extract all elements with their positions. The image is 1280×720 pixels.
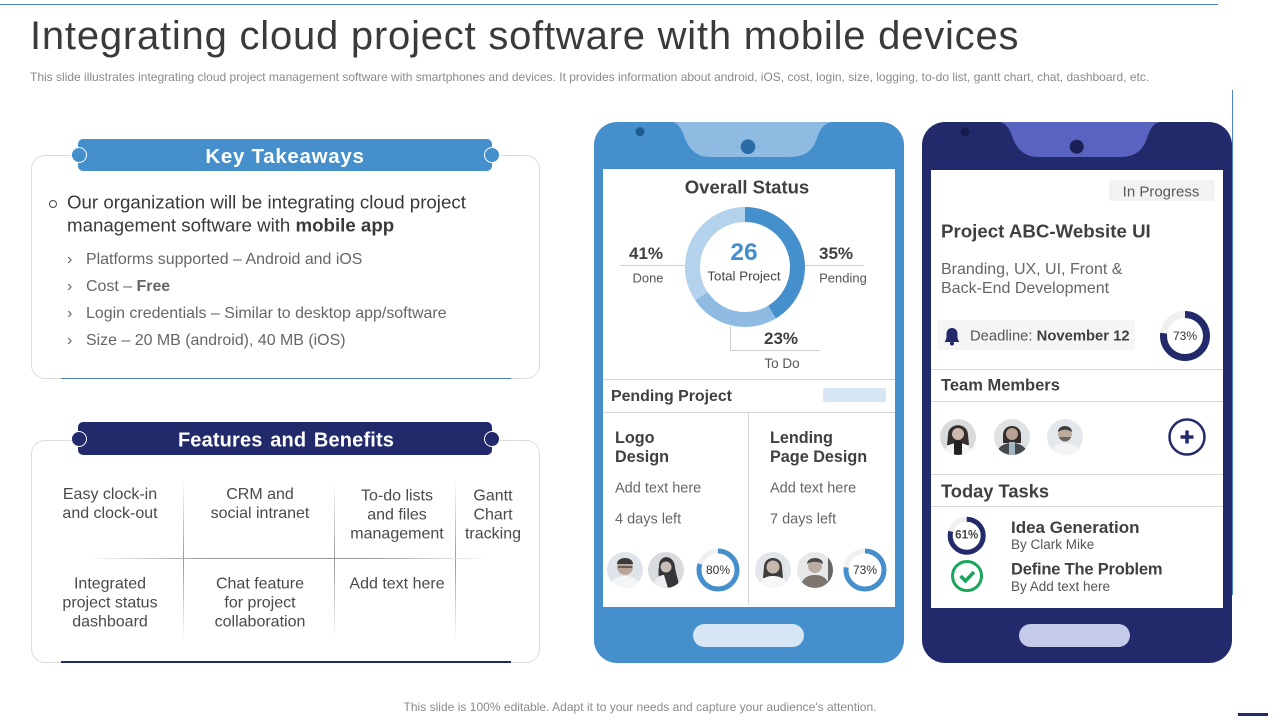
total label: Total Project — [707, 268, 781, 283]
feature: to-do — [350, 487, 444, 542]
panel: features and benefits — [31, 422, 540, 663]
feature: clock-in: and clock-out — [62, 504, 158, 522]
task: logo text: Add text here — [615, 481, 701, 497]
feature: add text: Add text here — [349, 575, 445, 592]
heading: key takeaways — [78, 139, 492, 171]
heading: today tasks: Today Tasks — [941, 480, 1049, 501]
label: done: Done — [632, 271, 664, 286]
label: to do: To Do — [764, 356, 800, 371]
total number: 26 — [730, 239, 758, 266]
feature: dashboard: project status — [62, 594, 158, 611]
panel: phone overall status — [594, 122, 904, 663]
top rule — [0, 4, 1218, 5]
ring label 80: 80% — [706, 563, 730, 577]
progress ring 73 — [846, 551, 884, 589]
task: lending design: Page Design — [770, 448, 867, 466]
list: platforms: Platforms supported – Android and iOS — [86, 251, 362, 268]
list: cost: Cost – Free — [86, 278, 170, 295]
heading: team members: Team Members — [941, 377, 1060, 395]
title: Integrating cloud project software with mobile devices — [30, 14, 1019, 58]
feature: to-do: To-do lists — [361, 487, 433, 504]
feature: chat: for project — [224, 594, 296, 611]
panel: phone project detail — [922, 122, 1232, 663]
icon: add member — [1170, 420, 1204, 454]
task: logo design: Design — [615, 448, 669, 466]
list: login: Login credentials – Similar to desktop app/software — [86, 305, 447, 322]
bottom accent — [61, 378, 511, 379]
list: size: › — [67, 332, 72, 349]
task: define problem: Define The Problem — [1011, 561, 1162, 579]
feature: chat — [215, 575, 305, 630]
task: logo days: 4 days left — [615, 512, 681, 528]
stat: to do: 23% — [764, 329, 798, 348]
subtitle: This slide illustrates integrating cloud project management software with smartphones and devices. It provides information about android, iOS, cost, login, size, logging, to-do list, gantt chart, chat, dashboard, etc. — [30, 70, 1149, 84]
task: lending text: Add text here — [770, 481, 856, 497]
feature: gantt: tracking — [465, 525, 521, 542]
stat: done: 41% — [629, 244, 663, 263]
avatars — [940, 419, 976, 455]
task: logo design — [615, 428, 669, 466]
feature: dashboard: Integrated — [74, 575, 146, 592]
feature: gantt — [465, 487, 521, 542]
stat: pending: 35% — [819, 244, 853, 263]
main statement: Our organization will be integrating cloud project — [67, 191, 466, 212]
label: pending: Pending — [819, 271, 867, 286]
feature: clock-in — [62, 486, 158, 522]
footer note: This slide is 100% editable. Adapt it to your needs and capture your audience's attention. — [403, 700, 877, 714]
feature: gantt: Chart — [473, 506, 513, 523]
feature: crm — [211, 486, 310, 522]
ring label 73: 73% — [853, 563, 877, 577]
task: idea generation: Idea Generation — [1011, 518, 1139, 537]
feature: chat: collaboration — [215, 613, 305, 630]
right rule — [1232, 90, 1233, 595]
avatars — [607, 552, 643, 588]
header knob left — [71, 431, 87, 447]
progress ring 61 — [950, 519, 983, 552]
description — [941, 261, 1122, 297]
progress ring 73 — [1164, 314, 1206, 358]
heading: pending project: Pending Project — [611, 388, 732, 405]
heading: key takeaways: Key Takeaways — [205, 145, 365, 168]
feature: crm: CRM and — [226, 486, 294, 502]
donut chart — [692, 214, 798, 320]
task: lending days: 7 days left — [770, 512, 836, 528]
task: define owner: By Add text here — [1011, 579, 1110, 594]
phone body graphics — [594, 122, 904, 663]
feature: to-do: and files — [367, 506, 427, 523]
list: cost: › — [67, 278, 72, 295]
ring label 61: 61% — [955, 529, 978, 541]
feature: to-do: management — [350, 525, 444, 542]
icon: bell — [944, 328, 960, 346]
feature: dashboard: dashboard — [72, 613, 148, 630]
card outline — [31, 440, 540, 663]
task: lending design: Lending — [770, 428, 833, 446]
main statement line 2: management software with mobile app — [67, 214, 394, 235]
card outline — [31, 155, 540, 379]
feature: crm: social intranet — [211, 504, 309, 522]
phone body graphics — [922, 122, 1232, 663]
description: Branding, UX, UI, Front & — [941, 261, 1122, 278]
list: login: › — [67, 305, 72, 322]
heading: features and benefits: Features and Benefits — [178, 430, 394, 452]
list: platforms: › — [67, 251, 72, 268]
feature: clock-in: Easy clock-in — [63, 486, 157, 502]
task: lending design — [770, 428, 867, 466]
task: idea owner: By Clark Mike — [1011, 537, 1094, 552]
feature: dashboard — [62, 575, 158, 630]
page marker — [1238, 713, 1268, 716]
header knob left — [71, 147, 87, 163]
deadline: Deadline: November 12 — [970, 328, 1130, 344]
list: size: Size – 20 MB (android), 40 MB (iOS) — [86, 332, 346, 349]
task: logo design: Logo — [615, 428, 655, 446]
status chip: In Progress — [1123, 183, 1199, 200]
icon: check — [952, 562, 982, 590]
heading: features and benefits — [78, 422, 492, 455]
heading: overall status: Overall Status — [685, 176, 809, 197]
header knob right — [484, 431, 500, 447]
header knob right — [484, 147, 500, 163]
main bullet — [49, 200, 57, 208]
panel: key takeaways — [31, 139, 540, 379]
description: Back-End Development — [941, 280, 1109, 297]
ring label 73: 73% — [1173, 329, 1197, 343]
progress ring 80 — [699, 551, 737, 589]
feature: gantt: Gantt — [473, 487, 513, 504]
heading: project: Project ABC-Website UI — [941, 220, 1151, 241]
bottom accent — [61, 661, 511, 662]
feature: chat: Chat feature — [216, 575, 304, 592]
